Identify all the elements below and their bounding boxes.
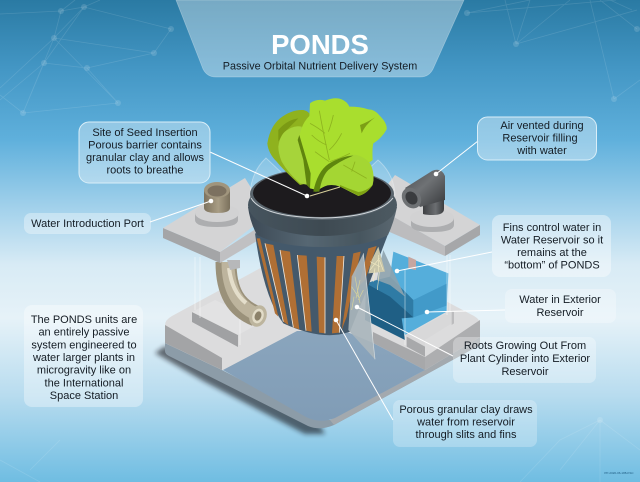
callout: roots: Reservoir [501,366,549,378]
pot collar [248,207,397,247]
plant cylinder [248,158,397,335]
leader lines [150,141,505,420]
callout: passive system description: the International [45,377,123,389]
callout: fins [492,215,611,277]
callout: exterior reservoir [505,289,616,323]
callout: exterior reservoir: Reservoir [536,307,584,319]
right top plate [372,175,480,256]
callout: fins: remains at the [517,247,587,259]
callout: water introduction port [24,213,151,234]
callout: air vent: Reservoir filling [502,132,578,144]
callout: porous clay: water from reservoir [416,416,515,428]
callout: seed insertion: roots to breathe [106,164,184,176]
callout: roots [453,337,596,383]
callout: passive system description [24,305,143,407]
transparent walls [195,255,450,345]
callout: fins: Fins control water in [503,222,601,234]
credit: PP-2020-06-188-KSC [604,471,634,475]
callout: seed insertion: Porous barrier contains [88,140,202,152]
callout: seed insertion: granular clay and allows [86,152,205,164]
dome [250,158,395,195]
lettuce [267,98,387,196]
subtitle: Passive Orbital Nutrient Delivery System [223,60,417,72]
callout: passive system description: water larger plants in [32,352,135,364]
callout: seed insertion: Site of Seed Insertion [92,127,198,139]
anchor dots [209,172,438,322]
title panel [176,0,464,77]
callout: roots: Plant Cylinder into Exterior [460,353,590,365]
left top plate [163,178,268,263]
base plate [155,240,480,434]
icon: air vent elbow [398,170,454,232]
callout: exterior reservoir: Water in Exterior [519,294,601,306]
pot body with slits [255,233,388,335]
callout: porous clay [393,400,537,447]
callout: fins: Water Reservoir so it [501,234,603,246]
callout: fins: “bottom” of PONDS [504,260,600,272]
callout: air vent: with water [516,145,567,157]
soil [253,169,391,217]
callout: roots: Roots Growing Out From [464,340,586,352]
callout: passive system description: The PONDS units are [31,314,137,326]
callout: porous clay: through slits and fins [416,429,517,441]
left lower pedestal [192,300,262,347]
left curved water tube [226,260,270,329]
fins and roots [348,247,405,359]
callout: passive system description: Space Station [50,390,118,402]
callout: porous clay: Porous granular clay draws [399,404,533,416]
callout: water introduction port: Water Introduction Port [31,218,144,230]
callout: seed insertion [79,122,210,183]
callout: passive system description: an entirely passive [38,327,130,339]
diagram: PONDS unit [155,98,480,434]
callout: passive system description: system engineered to [31,339,137,351]
callout: air vent: Air vented during [500,120,584,132]
callout: air vent [478,117,596,160]
right water reservoir [365,252,454,357]
title: PONDS [271,29,369,60]
callout: passive system description: microgravity like on [37,365,131,377]
icon: water introduction port [195,182,239,227]
